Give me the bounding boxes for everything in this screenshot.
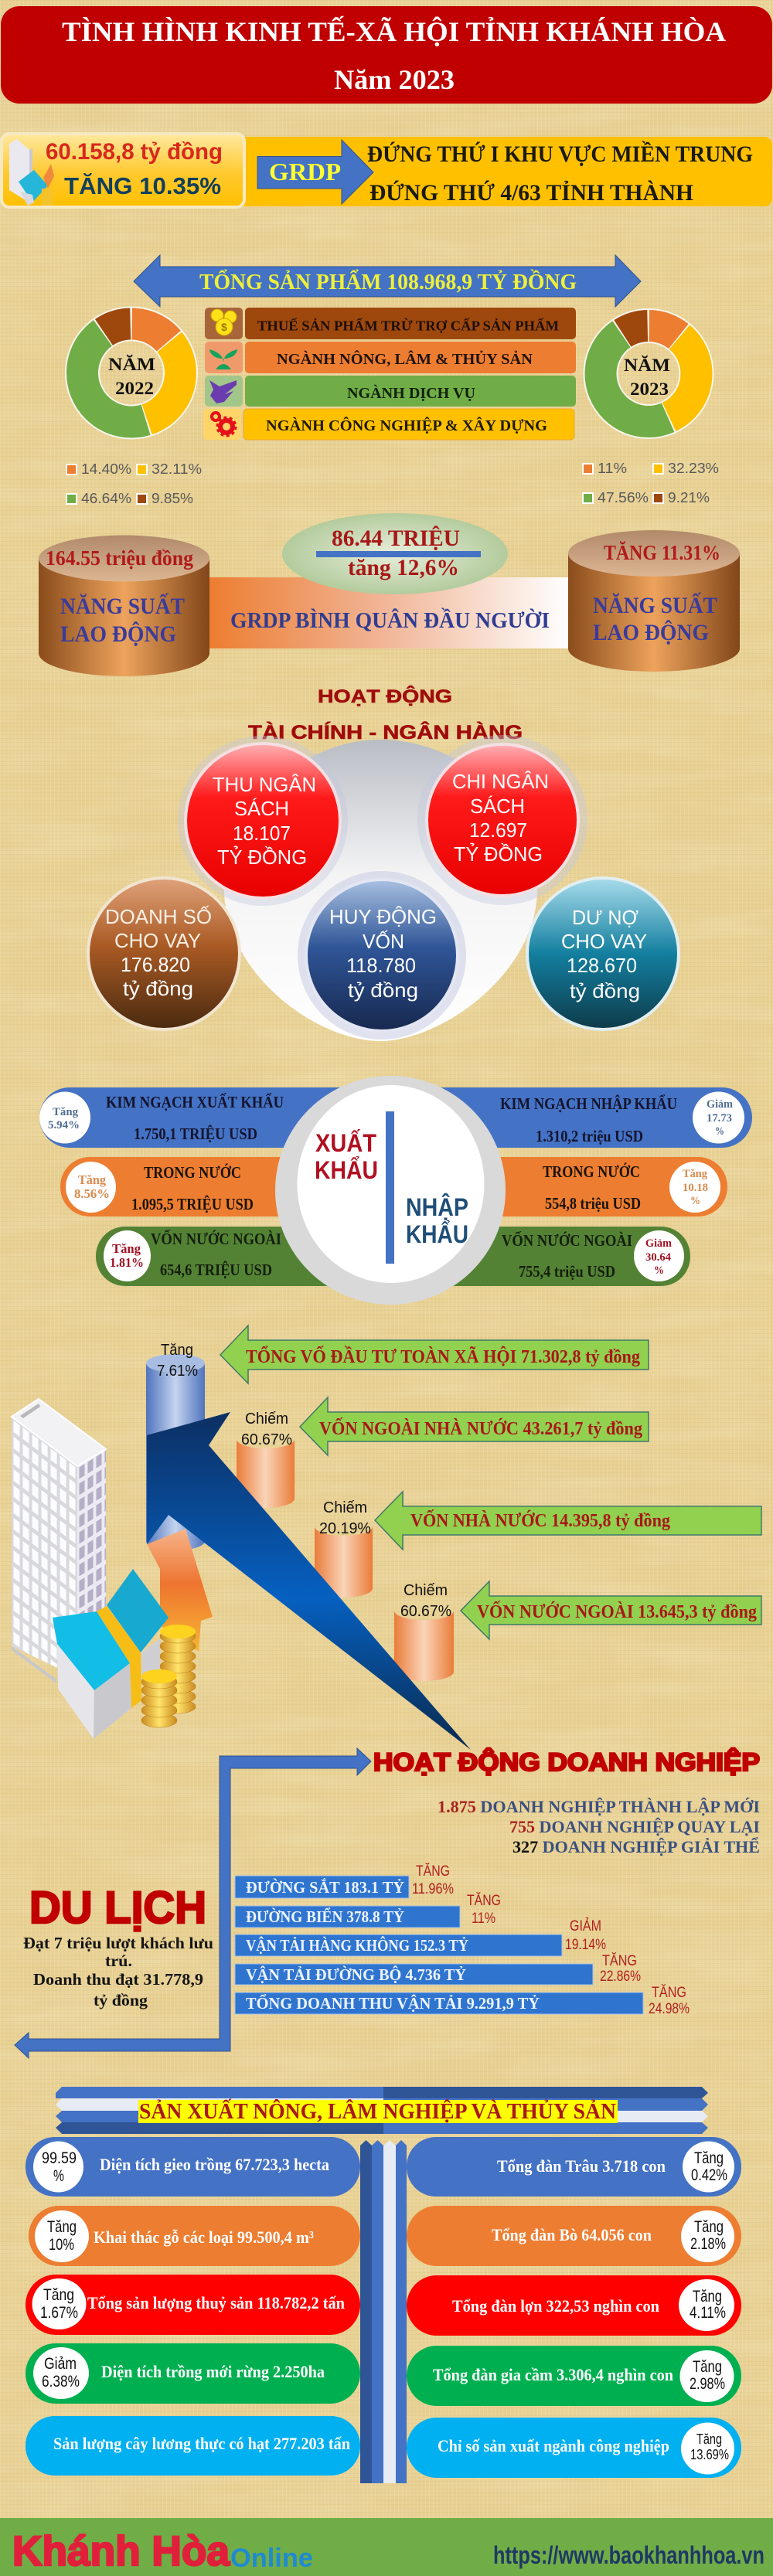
pill: cattle: 2.18% (690, 2235, 726, 2253)
label: foreign share: 60.67% (400, 1603, 451, 1620)
bar: rail (235, 1863, 454, 1898)
tourism text: Doanh thu đạt 31.778,9 (33, 1970, 203, 1989)
bar: sea: 11% (472, 1911, 495, 1927)
panel: transport bars (235, 1863, 690, 2017)
donut chart 2022: NĂM (108, 354, 155, 374)
icon: handshake (209, 380, 237, 403)
GRDP amount: 60.158,8 tỷ đồng (46, 139, 223, 165)
bubble: budget revenue (178, 736, 348, 906)
bubble: budget spending: TỶ ĐỒNG (454, 842, 543, 866)
pill: grain (26, 2416, 360, 2476)
bar: air: GIẢM (570, 1918, 601, 1935)
legend 2023: 47.56% (598, 490, 649, 505)
GRDP value box (2, 134, 244, 207)
label: non-state share (241, 1411, 292, 1448)
row: total trade: 17.73 (707, 1112, 732, 1125)
central circle (275, 1076, 506, 1305)
cylinder: productivity left: 164.55 triệu đồng (46, 546, 193, 570)
label: total share (157, 1342, 198, 1380)
central circle: XUẤT (315, 1129, 376, 1157)
icon: building (12, 1399, 106, 1683)
row: foreign: % (654, 1264, 664, 1277)
label: non-state share: 60.67% (241, 1431, 292, 1448)
legend 2023: 9.21% (668, 490, 710, 505)
row: total trade: 5.94% (48, 1119, 80, 1131)
pill: timber: Tăng (47, 2218, 77, 2236)
row: foreign: VỐN NƯỚC NGOÀI (502, 1231, 632, 1250)
heading: tourism: DU LỊCH (29, 1883, 206, 1933)
row: domestic: Tăng (683, 1168, 707, 1180)
heading: finance (248, 686, 523, 744)
enterprise stats: 327 DOANH NGHIỆP GIẢI THỂ (512, 1837, 760, 1856)
row: foreign: Giảm (645, 1237, 672, 1250)
panel: enterprises (373, 1748, 760, 1856)
band: per capita (209, 577, 570, 648)
pill: cattle: Tổng đàn Bò 64.056 con (492, 2225, 652, 2244)
bubble: loan turnover: tỷ đồng (123, 977, 193, 1000)
bubble: outstanding loans: tỷ đồng (570, 979, 640, 1002)
central circle: KHẨU (406, 1220, 468, 1248)
pill: industrial index: Tăng (696, 2431, 722, 2447)
bubble: outstanding loans: CHO VAY (561, 930, 647, 953)
pill: new forest: 6.38% (42, 2373, 80, 2391)
pill: new forest: Giảm (44, 2355, 77, 2373)
icon: orange arrow (147, 1529, 213, 1652)
label: total share: Tăng (161, 1342, 193, 1359)
pill: fishery: 1.67% (40, 2304, 78, 2322)
icon: coins: $ (221, 321, 227, 333)
row: foreign: 30.64 (645, 1251, 671, 1264)
sector bar: tax (205, 308, 576, 339)
donut chart 2022 (82, 324, 181, 422)
arrow: total social investment (220, 1325, 649, 1383)
enterprise stats: 1.875 DOANH NGHIỆP THÀNH LẬP MỚI (438, 1797, 760, 1816)
central circle: KHẨU (315, 1156, 378, 1184)
arrow: foreign capital: VỐN NƯỚC NGOÀI 13.645,3 tỷ đồng (477, 1601, 757, 1622)
cylinder: productivity left: LAO ĐỘNG (60, 621, 176, 647)
central white shape (224, 740, 537, 1041)
bar: rail: TĂNG (416, 1863, 450, 1880)
bar: air: VẬN TẢI HÀNG KHÔNG 152.3 TỶ (246, 1936, 468, 1955)
donut chart 2022: 2022 (115, 379, 154, 398)
arrow: state capital: VỐN NHÀ NƯỚC 14.395,8 tỷ đồng (410, 1510, 670, 1531)
pill: timber: 10% (49, 2236, 74, 2254)
label: state share: Chiếm (323, 1499, 367, 1516)
donut chart 2023 (601, 326, 696, 422)
legend 2022: 9.85% (152, 491, 193, 506)
oval: per capita value: tăng 12,6% (348, 555, 459, 580)
sector bar: tax: THUẾ SẢN PHẨM TRỪ TRỢ CẤP SẢN PHẨM (257, 317, 559, 334)
bar: sea (235, 1893, 501, 1928)
sector bar: agriculture (205, 342, 576, 373)
bar: total transport revenue: TỔNG DOANH THU VẬN TẢI 9.291,9 TỶ (246, 1994, 540, 2013)
bar: total transport revenue (235, 1985, 690, 2017)
row: total trade (39, 1087, 752, 1148)
central circle: NHẬP (406, 1193, 468, 1221)
pill: poultry: Tổng đàn gia cầm 3.306,4 nghìn con (433, 2365, 673, 2384)
cylinder: total investment (146, 1354, 205, 1373)
arrow: connector (15, 1748, 371, 2058)
sector bar: industry (203, 409, 574, 440)
label: state share (319, 1499, 371, 1537)
row: total trade: 1.310,2 triệu USD (536, 1127, 643, 1145)
cylinder: productivity left: NĂNG SUẤT (60, 593, 185, 619)
label: foreign share: Chiếm (404, 1582, 448, 1599)
pill: sown area (26, 2137, 360, 2197)
icon: building and house (9, 139, 54, 206)
panel: GRDP (2, 134, 772, 207)
row: foreign (96, 1227, 690, 1286)
bar: rail: ĐƯỜNG SẮT 183.1 TỶ (246, 1878, 404, 1897)
row: total trade: KIM NGẠCH NHẬP KHẨU (500, 1094, 677, 1113)
sector bar: industry: NGÀNH CÔNG NGHIỆP & XÂY DỰNG (266, 416, 547, 434)
panel: GRDP per capita (39, 513, 740, 676)
row: foreign: VỐN NƯỚC NGOÀI (151, 1230, 281, 1248)
label: foreign share (400, 1582, 451, 1620)
row: foreign: 755,4 triệu USD (519, 1262, 615, 1281)
oval: per capita value (282, 513, 508, 594)
row: domestic: 8.56% (74, 1186, 110, 1201)
legend 2023: 11% (598, 461, 627, 476)
cylinder: productivity left (39, 535, 209, 676)
pill: cattle: Tăng (694, 2218, 724, 2236)
pill: industrial index: 13.69% (690, 2447, 729, 2462)
bubble: capital mobilised: HUY ĐỘNG (329, 905, 437, 928)
arrow: total product (134, 255, 641, 307)
panel: investment (12, 1325, 761, 1750)
row: domestic: TRONG NƯỚC (144, 1163, 241, 1182)
bubble: capital mobilised: tỷ đồng (348, 978, 418, 1002)
row: total trade: Tăng (53, 1106, 78, 1118)
enterprise stats: 755 DOANH NGHIỆP QUAY LẠI (509, 1817, 760, 1836)
oval: per capita value: 86.44 TRIỆU (332, 526, 460, 551)
legend 2022: 32.11% (152, 461, 202, 477)
bar: air: 19.14% (565, 1937, 606, 1953)
legend 2022 (66, 461, 202, 506)
row: domestic: Tăng (78, 1172, 106, 1187)
tourism text (23, 1934, 213, 2009)
label: state share: 20.19% (319, 1520, 371, 1537)
row: foreign: Tăng (112, 1241, 141, 1256)
bar: road (235, 1953, 641, 1985)
bar: sea: ĐƯỜNG BIỂN 378.8 TỶ (246, 1907, 404, 1926)
bubble: budget revenue: THU NGÂN (213, 773, 316, 796)
cylinder: productivity right: NĂNG SUẤT (593, 592, 717, 618)
row: domestic: % (690, 1195, 700, 1207)
bubble: loan turnover (88, 878, 240, 1029)
bubble: budget spending: SÁCH (470, 795, 525, 818)
bar: air (235, 1918, 606, 1956)
bar: road: 22.86% (600, 1969, 641, 1985)
label: total share: 7.61% (157, 1363, 198, 1380)
pill: sown area: % (53, 2167, 64, 2185)
bar: total transport revenue: 24.98% (649, 2001, 690, 2017)
heading: finance: TÀI CHÍNH - NGÂN HÀNG (248, 720, 523, 744)
ranking text (367, 141, 753, 206)
label: non-state share: Chiếm (245, 1411, 288, 1428)
row: domestic: TRONG NƯỚC (543, 1162, 640, 1181)
pill: timber (29, 2206, 360, 2266)
arrow: big blue growth arrow (147, 1412, 471, 1750)
pill: poultry: Tăng (693, 2358, 722, 2376)
pill: buffalo: 0.42% (691, 2166, 727, 2184)
pill: fishery: Tổng sản lượng thuỷ sản 118.782,2 tấn (87, 2293, 345, 2312)
cylinder: foreign capital (394, 1611, 454, 1681)
bubble: budget revenue: TỶ ĐỒNG (217, 846, 307, 869)
bubble: loan turnover: CHO VAY (114, 929, 201, 952)
row: domestic (60, 1157, 727, 1217)
pill: industrial index (407, 2418, 741, 2478)
row: foreign: 1.81% (110, 1255, 144, 1270)
cylinder: productivity right (568, 530, 740, 672)
arrow: foreign capital (461, 1581, 761, 1639)
bubble: loan turnover: 176.820 (121, 953, 190, 976)
pill: new forest (26, 2343, 360, 2404)
arrow: non-state capital: VỐN NGOÀI NHÀ NƯỚC 43.261,7 tỷ đồng (319, 1418, 642, 1439)
cylinder: state capital (315, 1526, 373, 1598)
donut chart 2023: 2023 (630, 379, 669, 399)
bubble: loan turnover: DOANH SỐ (105, 905, 212, 928)
cylinder: productivity right: LAO ĐỘNG (593, 620, 709, 645)
pill: grain: Sản lượng cây lương thực có hạt 277.203 tấn (53, 2434, 350, 2453)
logo: Khánh Hòa (12, 2528, 230, 2574)
sector bar: services: NGÀNH DỊCH VỤ (347, 384, 475, 402)
bubble: budget spending: CHI NGÂN (452, 770, 549, 793)
tourism text: tỷ đồng (94, 1991, 148, 2009)
bubble: capital mobilised: VỐN (363, 930, 404, 953)
GRDP growth: TĂNG 10.35% (64, 172, 221, 199)
bubble: outstanding loans (527, 878, 679, 1029)
row: domestic: 1.095,5 TRIỆU USD (131, 1195, 254, 1213)
cylinder body: total investment (146, 1363, 205, 1550)
pill: pigs: Tổng đàn lợn 322,53 nghìn con (452, 2296, 659, 2316)
bubble: outstanding loans: 128.670 (567, 954, 637, 977)
row: total trade: KIM NGẠCH XUẤT KHẨU (106, 1093, 284, 1111)
legend 2022: 46.64% (81, 491, 131, 506)
pill: sown area: Diện tích gieo trồng 67.723,3 hecta (100, 2155, 329, 2174)
enterprise stats (438, 1797, 760, 1856)
arrow: non-state capital (300, 1397, 649, 1455)
pill: pigs: Tăng (693, 2288, 722, 2305)
bar: rail: 11.96% (412, 1881, 454, 1897)
row: domestic: 10.18 (683, 1182, 708, 1194)
row: total trade: % (715, 1125, 724, 1138)
pill: new forest: Diện tích trồng mới rừng 2.250ha (101, 2362, 325, 2381)
pill: cattle (407, 2206, 741, 2266)
donut chart 2023: NĂM (624, 355, 670, 375)
pill: pigs: 4.11% (690, 2304, 726, 2322)
icon: house (53, 1569, 169, 1739)
pill: industrial index: Chỉ số sản xuất ngành công nghiệp (438, 2436, 669, 2455)
logo: Online (230, 2544, 313, 2573)
title banner (1, 6, 772, 104)
cylinder: productivity right: TĂNG 11.31% (604, 541, 720, 564)
arrow: GRDP (257, 140, 373, 204)
pill: fishery: Tăng (43, 2286, 74, 2304)
panel: agriculture (26, 2087, 741, 2483)
pill: sown area: 99.59 (42, 2149, 77, 2167)
panel: finance and banking (88, 686, 679, 1041)
legend 2023 (583, 461, 719, 505)
ranking text: ĐỨNG THỨ 4/63 TỈNH THÀNH (369, 180, 693, 206)
band: per capita: GRDP BÌNH QUÂN ĐẦU NGƯỜI (230, 608, 550, 633)
bar: road: VẬN TẢI ĐƯỜNG BỘ 4.736 TỶ (246, 1965, 466, 1984)
pill: buffalo: Tổng đàn Trâu 3.718 con (497, 2156, 666, 2176)
row: total trade: Giảm (707, 1098, 733, 1111)
footer (0, 2518, 773, 2576)
pill: pigs (407, 2275, 741, 2336)
bubble: budget revenue: SÁCH (234, 797, 289, 820)
cylinder: non-state capital (237, 1439, 295, 1508)
bubble: budget revenue: 18.107 (233, 822, 291, 845)
bubble: capital mobilised: 118.780 (346, 954, 416, 977)
panel: total product structure (66, 255, 719, 506)
row: foreign: 654,6 TRIỆU USD (160, 1261, 272, 1279)
pill: timber: Khai thác gỗ các loại 99.500,4 m³ (94, 2227, 314, 2247)
arrow: GRDP: GRDP (269, 158, 341, 185)
bar: total transport revenue: TĂNG (652, 1985, 686, 2001)
arrow: total product: TỔNG SẢN PHẨM 108.968,9 TỶ ĐỒNG (199, 270, 577, 294)
panel: tourism (23, 1883, 213, 2009)
bar: road: TĂNG (602, 1953, 637, 1969)
legend 2022: 14.40% (81, 461, 131, 477)
pill: poultry: 2.98% (690, 2375, 725, 2393)
row: domestic: 554,8 triệu USD (545, 1194, 641, 1213)
ribbon heading (56, 2087, 708, 2134)
tourism text: Đạt 7 triệu lượt khách lưu (23, 1934, 213, 1952)
icon: gold coins (141, 1625, 196, 1727)
tourism text: trú. (105, 1952, 132, 1970)
arrow: state capital (375, 1492, 761, 1550)
panel: import export (39, 1076, 752, 1305)
heading: finance: HOẠT ĐỘNG (318, 686, 452, 707)
pill: fishery (26, 2275, 360, 2335)
icon: sprout (209, 349, 237, 369)
sector bar: agriculture: NGÀNH NÔNG, LÂM & THỦY SẢN (277, 349, 533, 368)
ranking text: ĐỨNG THỨ I KHU VỰC MIỀN TRUNG (367, 141, 753, 167)
row: total trade: 1.750,1 TRIỆU USD (134, 1125, 257, 1143)
arrow: total social investment: TỔNG VỐ ĐẦU TƯ TOÀN XÃ HỘI 71.302,8 tỷ đồng (246, 1346, 640, 1367)
icon: coins (211, 309, 237, 335)
bubble: budget spending: 12.697 (469, 818, 527, 842)
icon: gears (212, 413, 236, 436)
subtitle year: Năm 2023 (334, 64, 455, 95)
legend 2023: 32.23% (668, 461, 719, 476)
heading: enterprises: HOẠT ĐỘNG DOANH NGHIỆP (373, 1748, 760, 1776)
pill: poultry (407, 2346, 741, 2406)
bubble: capital mobilised (298, 871, 466, 1040)
bubble: outstanding loans: DƯ NỢ (572, 906, 638, 929)
pill: buffalo: Tăng (694, 2149, 724, 2167)
bar: sea: TĂNG (467, 1893, 501, 1909)
sector bar: services (205, 376, 576, 407)
bubble: budget spending (417, 735, 587, 905)
pill: buffalo (407, 2137, 741, 2197)
central ribbon column (360, 2140, 407, 2483)
ribbon heading: SẢN XUẤT NÔNG, LÂM NGHIỆP VÀ THỦY SẢN (139, 2099, 616, 2124)
title: TÌNH HÌNH KINH TẾ-XÃ HỘI TỈNH KHÁNH HÒA (62, 16, 726, 47)
